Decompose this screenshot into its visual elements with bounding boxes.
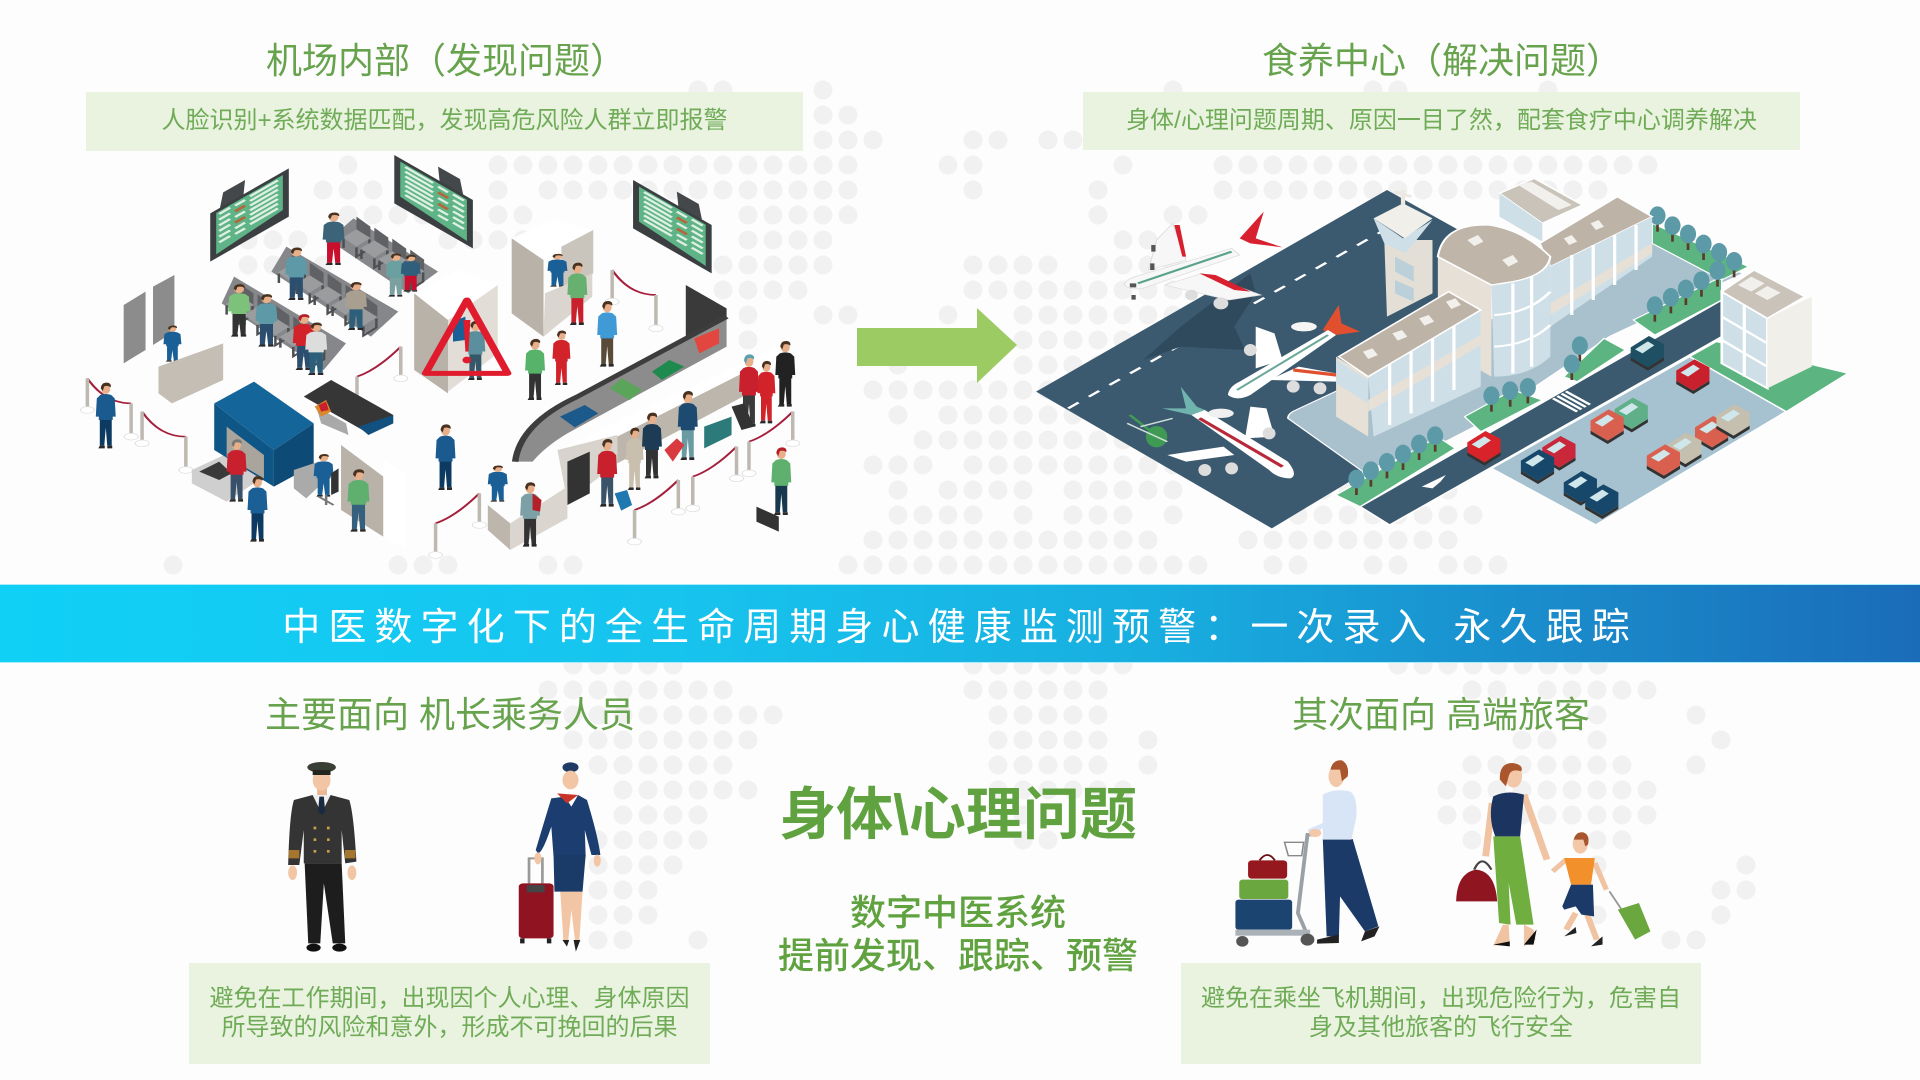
parked airplane teal tail	[1162, 387, 1294, 478]
illustration: airport interior isometric scene	[80, 155, 800, 558]
upper service counter	[512, 220, 593, 337]
callout: dietary solution: 身体/心理问题周期、原因一目了然，配套食疗中心调养解决	[1126, 107, 1757, 134]
traveler figures	[1235, 760, 1650, 947]
callout: face recognition: 人脸识别+系统数据匹配，发现高危风险人群立即报警	[161, 107, 728, 134]
arrow	[857, 308, 1017, 383]
helicopter	[1127, 415, 1173, 447]
crew figures	[288, 762, 601, 952]
baggage carousel	[488, 285, 776, 550]
center subheading: digital TCM system: 数字中医系统	[850, 892, 1066, 933]
heading: crew: 主要面向 机长乘务人员	[265, 694, 635, 735]
pilot	[288, 762, 356, 952]
callout: dietary solution	[1083, 92, 1800, 150]
callout: travelers	[1181, 963, 1701, 1064]
center subheading: digital TCM system: 提前发现、跟踪、预警	[778, 935, 1138, 976]
heading: airport interior: 机场内部（发现问题）	[266, 40, 626, 81]
parked airplane red tail	[1228, 305, 1360, 398]
center heading: physical and mental problems: 身体\心理问题	[779, 783, 1137, 847]
parked cars	[1467, 336, 1750, 519]
heading: dietary center: 食养中心（解决问题）	[1262, 40, 1622, 81]
airplane taking off	[1124, 212, 1282, 309]
center subheading: digital TCM system	[778, 892, 1138, 976]
control tower	[1374, 190, 1432, 317]
banner: 中医数字化下的全生命周期身心健康监测预警：一次录入 永久跟踪	[282, 607, 1638, 649]
passengers and staff on the floor	[96, 301, 795, 547]
runway and apron	[1036, 190, 1743, 528]
callout: travelers: 身及其他旅客的飞行安全	[1309, 1014, 1573, 1041]
security scanner	[192, 380, 406, 548]
waiting area seats with passengers	[222, 212, 438, 375]
boarding gate doors and desk	[124, 275, 223, 403]
terminal building	[1336, 178, 1652, 437]
departure boards	[210, 155, 712, 273]
warning booth with red triangle icon	[414, 270, 508, 393]
man pushing luggage cart	[1235, 760, 1380, 947]
woman with child and suitcase	[1456, 763, 1650, 946]
rope barriers	[80, 270, 800, 558]
banner	[0, 584, 1920, 663]
callout: crew: 避免在工作期间，出现因个人心理、身体原因	[210, 985, 690, 1012]
parking lot and green areas	[1336, 223, 1848, 525]
luggage	[615, 403, 779, 532]
callout: travelers: 避免在乘坐飞机期间，出现危险行为，危害自	[1201, 985, 1681, 1012]
callout: crew	[189, 963, 710, 1064]
flight attendant with suitcase	[519, 762, 601, 952]
callout: crew: 所导致的风险和意外，形成不可挽回的后果	[222, 1014, 678, 1041]
callout: face recognition	[86, 92, 803, 151]
right office block	[1722, 270, 1812, 388]
heading: premium travelers: 其次面向 高端旅客	[1292, 694, 1590, 735]
illustration: airport exterior isometric scene	[1036, 179, 1846, 528]
trees	[1348, 206, 1742, 495]
